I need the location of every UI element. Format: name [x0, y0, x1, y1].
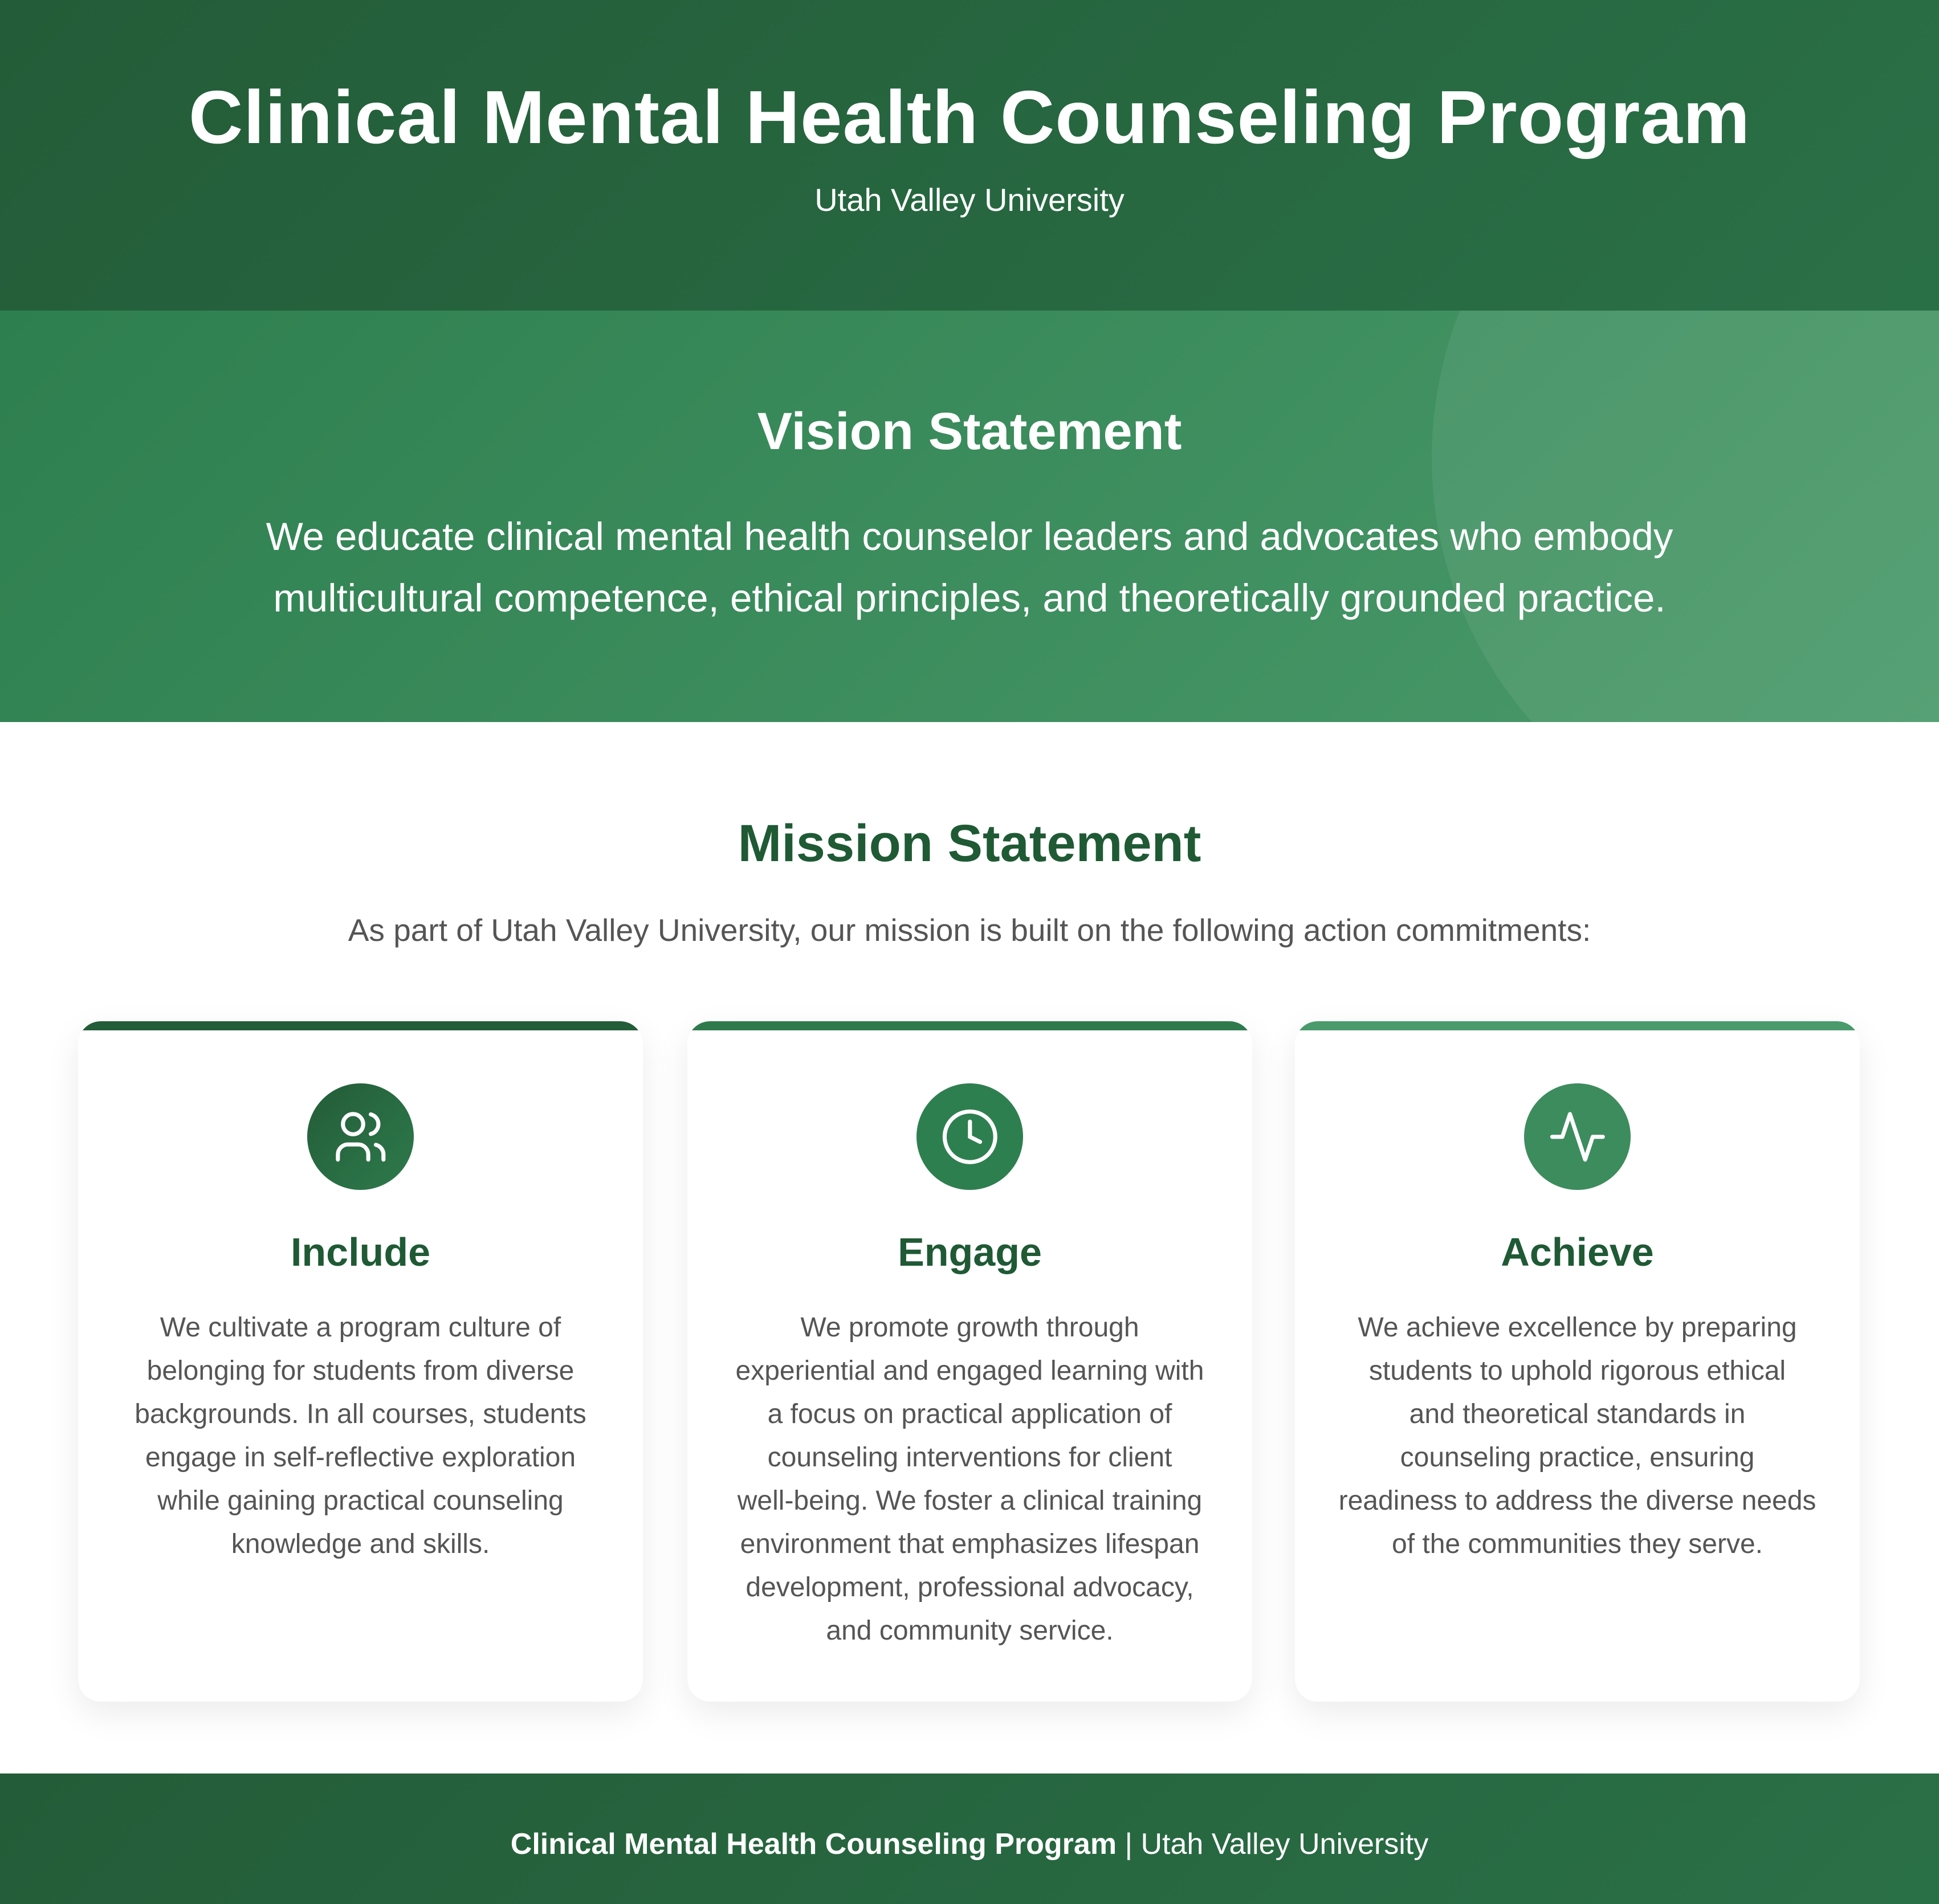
text: include — [135, 1312, 586, 1559]
text: achieve: We achieve excellence by preparing — [1358, 1312, 1797, 1343]
text: engage: development, professional advocacy, — [746, 1572, 1194, 1603]
text: engage: well-being. We foster a clinical training — [738, 1486, 1202, 1516]
text: engage: experiential and engaged learning with — [736, 1356, 1204, 1386]
vision section — [0, 311, 1939, 722]
card: achieve — [1295, 1021, 1860, 1702]
vision heading: Vision Statement — [757, 402, 1182, 460]
icon: clock — [916, 1083, 1023, 1190]
footer — [0, 1773, 1939, 1904]
subtitle: Utah Valley University — [814, 182, 1125, 218]
text: include: engage in self-reflective exploration — [145, 1442, 576, 1473]
text: include: backgrounds. In all courses, students — [135, 1399, 586, 1429]
text: engage: environment that emphasizes lifespan — [740, 1529, 1199, 1559]
text: include: We cultivate a program culture of — [160, 1312, 561, 1343]
vision text: multicultural competence, ethical principles, and theoretically grounded practice. — [273, 576, 1666, 620]
icon: pulse — [1524, 1083, 1631, 1190]
text: achieve: students to uphold rigorous ethical — [1369, 1356, 1786, 1386]
mission heading: Mission Statement — [738, 814, 1201, 873]
footer text: Clinical Mental Health Counseling Program | Utah Valley University — [511, 1828, 1428, 1861]
text: achieve: counseling practice, ensuring — [1400, 1442, 1754, 1473]
title: Clinical Mental Health Counseling Program — [189, 75, 1750, 159]
icon: people — [307, 1083, 414, 1190]
text: engage: and community service. — [826, 1616, 1114, 1646]
title: include: Include — [291, 1230, 430, 1274]
vision text: We educate clinical mental health counselor leaders and advocates who embody — [266, 515, 1673, 558]
text: achieve: readiness to address the diverse needs — [1339, 1486, 1816, 1516]
text: achieve: and theoretical standards in — [1410, 1399, 1745, 1429]
text: engage: a focus on practical application of — [768, 1399, 1172, 1429]
text: achieve: of the communities they serve. — [1392, 1529, 1763, 1559]
title: achieve: Achieve — [1501, 1230, 1654, 1274]
text: engage: We promote growth through — [800, 1312, 1139, 1343]
text: include: knowledge and skills. — [231, 1529, 490, 1559]
text: achieve — [1339, 1312, 1816, 1559]
header — [0, 0, 1939, 311]
card: include — [78, 1021, 643, 1702]
card: engage — [687, 1021, 1252, 1702]
vision text — [266, 515, 1673, 620]
text: include: belonging for students from diverse — [147, 1356, 574, 1386]
title: engage: Engage — [898, 1230, 1042, 1274]
text: engage: counseling interventions for client — [768, 1442, 1172, 1473]
text: engage — [736, 1312, 1204, 1646]
text: include: while gaining practical counseling — [157, 1486, 564, 1516]
mission subtitle: As part of Utah Valley University, our mission is built on the following action commitments: — [348, 912, 1591, 948]
